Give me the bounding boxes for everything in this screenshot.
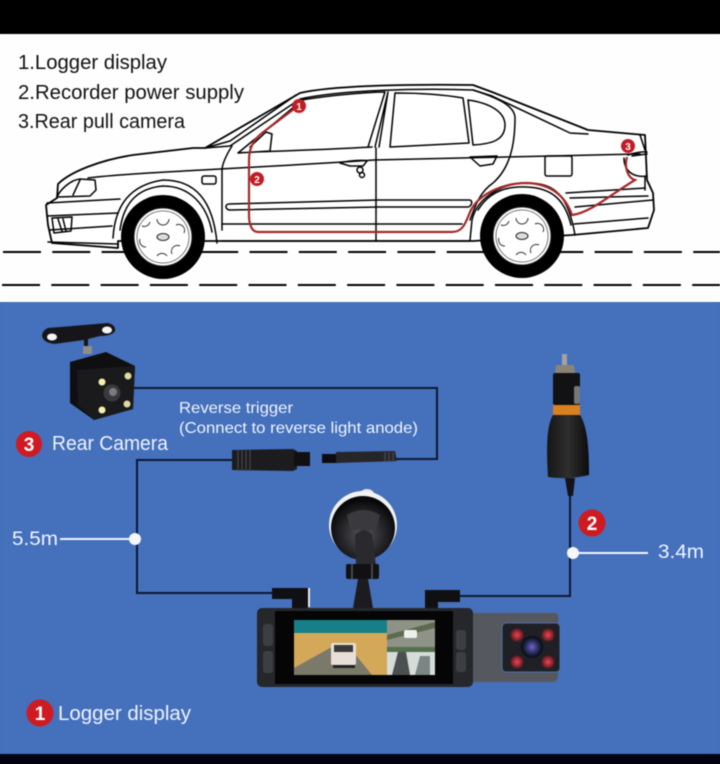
installation list text: 2.Recorder power supply: [18, 82, 244, 104]
connector: female: [232, 449, 310, 471]
top black band: [0, 0, 720, 34]
panel: car wiring diagram: [0, 34, 720, 302]
marker 1 on car: [292, 99, 306, 113]
screen image: [294, 620, 435, 675]
road dashes: [2, 252, 720, 285]
cables: [134, 388, 570, 596]
plug: rear camera to dashcam: [272, 588, 310, 608]
logger display label: [26, 700, 191, 726]
rear camera label: Rear Camera: [52, 433, 169, 455]
rear camera label: [16, 431, 169, 457]
rear wheel: [480, 194, 564, 278]
marker 3 on car: [621, 139, 635, 153]
second lens housing: [473, 613, 560, 682]
installation list text: [18, 52, 244, 133]
3.4m length callout: 3.4m: [658, 542, 704, 563]
connector: male: [322, 451, 397, 463]
5.5m length callout: [12, 529, 141, 550]
reverse trigger label: (Connect to reverse light anode): [179, 420, 418, 437]
badge 2: 2: [587, 514, 597, 535]
dash camera unit: [257, 608, 560, 687]
main body: [257, 608, 473, 687]
marker 1 on car: 1: [296, 102, 302, 113]
marker 3 on car: 3: [625, 142, 631, 153]
plug: power to dashcam: [425, 590, 460, 608]
rear camera label: 3: [24, 435, 34, 456]
logger display label: Logger display: [58, 703, 191, 725]
logger display label: 1: [35, 704, 46, 725]
5.5m length callout: 5.5m: [12, 529, 58, 550]
badge 2: [578, 510, 606, 536]
bottom dark band: [0, 754, 720, 764]
front wheel: [121, 195, 205, 279]
reverse trigger label: [179, 400, 418, 437]
3.4m length callout: [567, 542, 704, 563]
panel: wiring connection: [0, 302, 720, 754]
marker 2 on car: 2: [254, 175, 260, 186]
wiring route in red: [249, 106, 635, 232]
marker 2 on car: [250, 172, 264, 186]
icon: car charger: [547, 354, 589, 496]
installation list text: 1.Logger display: [18, 52, 167, 74]
car outline: [46, 85, 654, 248]
installation list text: 3.Rear pull camera: [18, 111, 186, 133]
icon: rear camera: [42, 323, 135, 420]
reverse trigger label: Reverse trigger: [179, 400, 294, 417]
icon: suction mount: [329, 489, 397, 608]
